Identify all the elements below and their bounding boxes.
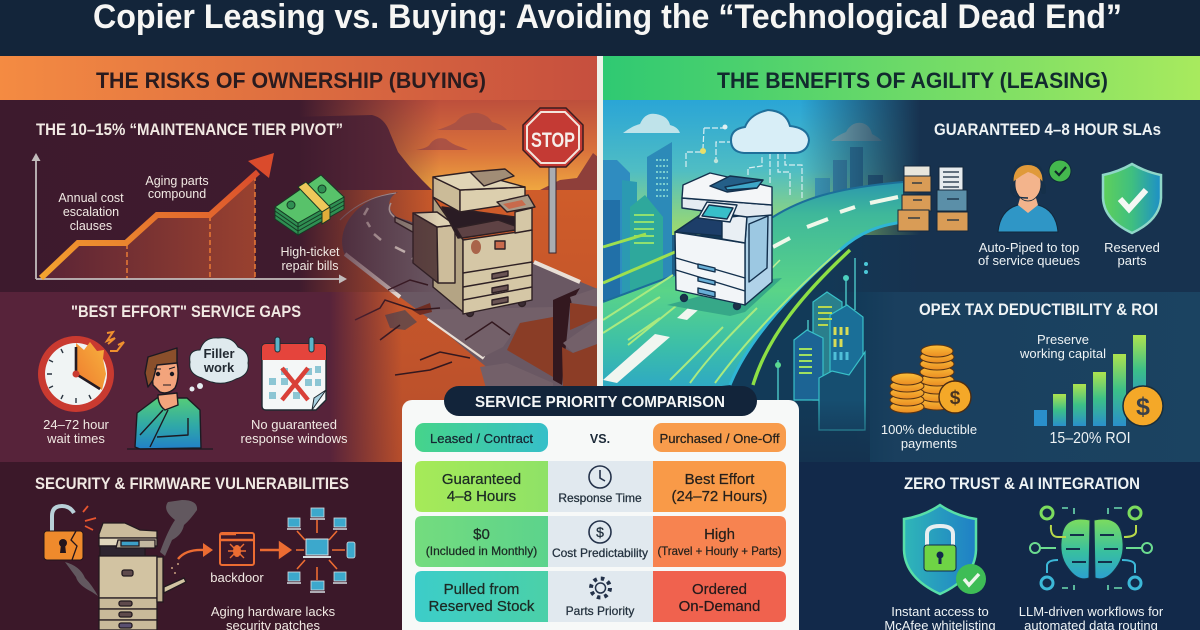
thought bubble [190, 338, 248, 392]
caption: service queues: Auto-Piped to top [979, 240, 1079, 255]
icon: compromised network [287, 508, 355, 592]
heading: OPEX TAX DEDUCTIBILITY & ROI [919, 301, 1158, 319]
band: benefits heading: THE BENEFITS OF AGILITY (LEASING) [717, 68, 1108, 93]
panel: zero trust and ai [795, 462, 1200, 630]
divider between sides [597, 56, 603, 406]
scanner top [682, 173, 772, 205]
caption: service queues [978, 240, 1080, 268]
row: cost predictability [415, 516, 786, 567]
chart: cost escalation line: compound [148, 187, 206, 201]
panel: security and firmware vulnerabilities [0, 462, 410, 630]
caption: response windows [241, 417, 348, 446]
row: response time: Guaranteed [442, 471, 521, 488]
row: parts priority [415, 571, 786, 622]
icon: calendar with x [262, 337, 326, 410]
foreground buildings [794, 292, 865, 430]
chart: cost escalation line: escalation [63, 205, 119, 219]
open cavity [442, 207, 515, 238]
band: risks heading [0, 56, 597, 100]
icon: security shield with lock [904, 505, 986, 594]
icon: clock [38, 332, 124, 412]
front [675, 232, 745, 305]
cracked slabs [417, 307, 553, 357]
heading: SECURITY & FIRMWARE VULNERABILITIES [35, 475, 349, 493]
vs label: VS. [590, 432, 610, 446]
caption: working capital: Preserve [1037, 332, 1089, 347]
caption: reserved parts: Reserved [1104, 240, 1160, 255]
drawer handles [492, 271, 508, 305]
panel fade top right [800, 100, 1200, 292]
row: cost predictability: Cost Predictability [552, 546, 648, 560]
heading: GUARANTEED 4–8 HOUR SLAs [934, 121, 1161, 139]
panel fade mid right [855, 292, 1200, 462]
caption: wait times [43, 417, 110, 446]
caption: repair bills [280, 245, 340, 273]
panel: maintenance tier pivot [0, 100, 440, 292]
column header: purchased: Purchased / One-Off [660, 431, 780, 446]
lane dashes [773, 197, 898, 247]
table title pill [444, 386, 757, 416]
rust stains [471, 240, 481, 254]
caption: llm workflows: LLM-driven workflows for [1019, 604, 1164, 619]
column header: leased [415, 423, 548, 452]
illustration: aging copier on cracked road [395, 169, 535, 316]
arrow: backdoor to network [260, 543, 290, 557]
caption: mcafee whitelisting: Instant access to [891, 604, 989, 619]
arrow: copier to backdoor [171, 543, 213, 574]
thought bubble: Filler [203, 346, 235, 361]
scanner unit [433, 177, 460, 212]
panel: opex tax deductibility [881, 301, 1163, 451]
row: parts priority: Ordered [692, 581, 747, 598]
icon: worried person [127, 348, 213, 449]
row: parts priority: Pulled from [444, 581, 519, 598]
right column [515, 208, 532, 233]
icon: check bubble [1049, 160, 1071, 182]
caption: backdoor: backdoor [210, 570, 264, 585]
caption: mcafee whitelisting [884, 604, 996, 630]
panel: risks of ownership scene [0, 100, 600, 630]
caption: service queues: of service queues [978, 253, 1080, 268]
caption: deductible payments: payments [901, 436, 958, 451]
icon: stop sign: STOP [531, 129, 575, 152]
heading: "BEST EFFORT" SERVICE GAPS [71, 303, 301, 321]
caption: aging hardware: Aging hardware lacks [211, 604, 336, 619]
bar chart: roi: $ [1136, 393, 1150, 421]
panel: opex tax deductibility: $ [950, 388, 961, 409]
band: benefits heading [603, 56, 1200, 100]
row: response time: Best Effort [685, 471, 755, 488]
caption: response windows: response windows [241, 431, 348, 446]
scanner lower strip [682, 198, 772, 217]
wheels [680, 294, 688, 302]
panel: service priority comparison table [402, 386, 799, 630]
caption: roi: 15–20% ROI [1050, 430, 1130, 447]
table title pill: SERVICE PRIORITY COMPARISON [475, 394, 725, 411]
icon: support agent [998, 163, 1058, 232]
column header: leased: Leased / Contract [430, 431, 533, 446]
small cloud [416, 138, 468, 150]
left wall [433, 197, 463, 312]
row: parts priority: On-Demand [679, 598, 760, 615]
side panel [745, 207, 772, 305]
road speed lines [603, 250, 840, 383]
clouds [437, 113, 507, 130]
crack hole [385, 310, 417, 330]
caption: aging hardware [211, 604, 336, 630]
icon: coin stacks [890, 345, 971, 413]
icon: broken padlock [44, 506, 96, 560]
caption: reserved parts [1104, 240, 1160, 268]
row: cost predictability: High [704, 526, 735, 543]
chart: cost escalation line: Aging parts [145, 174, 209, 188]
shadow on road [667, 278, 782, 316]
cracked road [342, 192, 600, 388]
caption: working capital [1019, 332, 1106, 361]
icon: cloud [731, 110, 809, 153]
caption: repair bills: repair bills [282, 259, 338, 273]
icon: reserved parts shield [1103, 164, 1161, 233]
caption: reserved parts: parts [1118, 253, 1147, 268]
skyline right of cloud [815, 147, 883, 210]
chart: cost escalation line: clauses [70, 219, 112, 233]
finisher [413, 213, 438, 283]
icon: backdoor folder with bug [220, 533, 254, 565]
row: cost predictability: (Included in Monthly) [426, 544, 537, 558]
chart: cost escalation line [32, 153, 347, 284]
row: response time [415, 461, 786, 512]
touch screen [698, 202, 737, 222]
icon: file boxes [898, 166, 968, 231]
panel: agility scene [603, 100, 1200, 630]
thought bubble: work [203, 360, 235, 375]
far mountain right [540, 153, 598, 190]
crack lines [355, 280, 510, 375]
band: risks heading: THE RISKS OF OWNERSHIP (BUYING) [96, 68, 486, 93]
row: cost predictability: $0 [473, 526, 490, 543]
icon: money stack [275, 175, 344, 235]
document feeder [470, 169, 514, 186]
row: response time: Response Time [558, 491, 642, 505]
clouds in sky [623, 114, 680, 133]
icon: stop sign [523, 108, 583, 253]
row: parts priority: Parts Priority [566, 604, 634, 618]
row: cost predictability: (Travel + Hourly + Parts) [658, 544, 782, 558]
document feeder [710, 176, 763, 192]
panel: guaranteed SLAs [898, 121, 1161, 268]
caption: repair bills: High-ticket [280, 245, 340, 259]
row: response time: 4–8 Hours [447, 488, 516, 505]
icon: ai brain circuit [1030, 507, 1152, 590]
caption: deductible payments: 100% deductible [881, 422, 977, 437]
toner band [675, 215, 722, 236]
heading: ZERO TRUST & AI INTEGRATION [904, 475, 1140, 493]
road lane dashes [364, 208, 420, 262]
column header: purchased [653, 423, 786, 452]
caption: llm workflows [1019, 604, 1164, 630]
skyline left [603, 142, 678, 305]
row: parts priority: Reserved Stock [429, 598, 535, 615]
row: response time: (24–72 Hours) [672, 488, 767, 505]
caption: deductible payments [881, 422, 977, 451]
road edge line [345, 254, 508, 385]
chart: cost escalation line: Annual cost [58, 191, 124, 205]
smoke [65, 500, 197, 596]
bar chart: roi [1034, 335, 1163, 426]
caption: working capital: working capital [1019, 346, 1106, 361]
output tray [395, 217, 432, 243]
illustration: modern copier [667, 173, 782, 316]
main body front [463, 230, 532, 314]
wheels [466, 310, 474, 316]
mesa mountain [290, 115, 432, 190]
circuit lines [686, 128, 802, 198]
caption: response windows: No guaranteed [251, 417, 337, 432]
icon: damaged copier [99, 523, 186, 630]
caption: wait times: 24–72 hour [43, 417, 110, 432]
panel: best effort service gaps [0, 292, 402, 462]
caption: wait times: wait times [46, 431, 105, 446]
control panel [497, 195, 535, 212]
outer lime edge [753, 250, 850, 385]
heading: THE 10–15% “MAINTENANCE TIER PIVOT” [36, 121, 343, 139]
green highway [603, 182, 903, 400]
row: cost predictability: $ [596, 524, 604, 540]
